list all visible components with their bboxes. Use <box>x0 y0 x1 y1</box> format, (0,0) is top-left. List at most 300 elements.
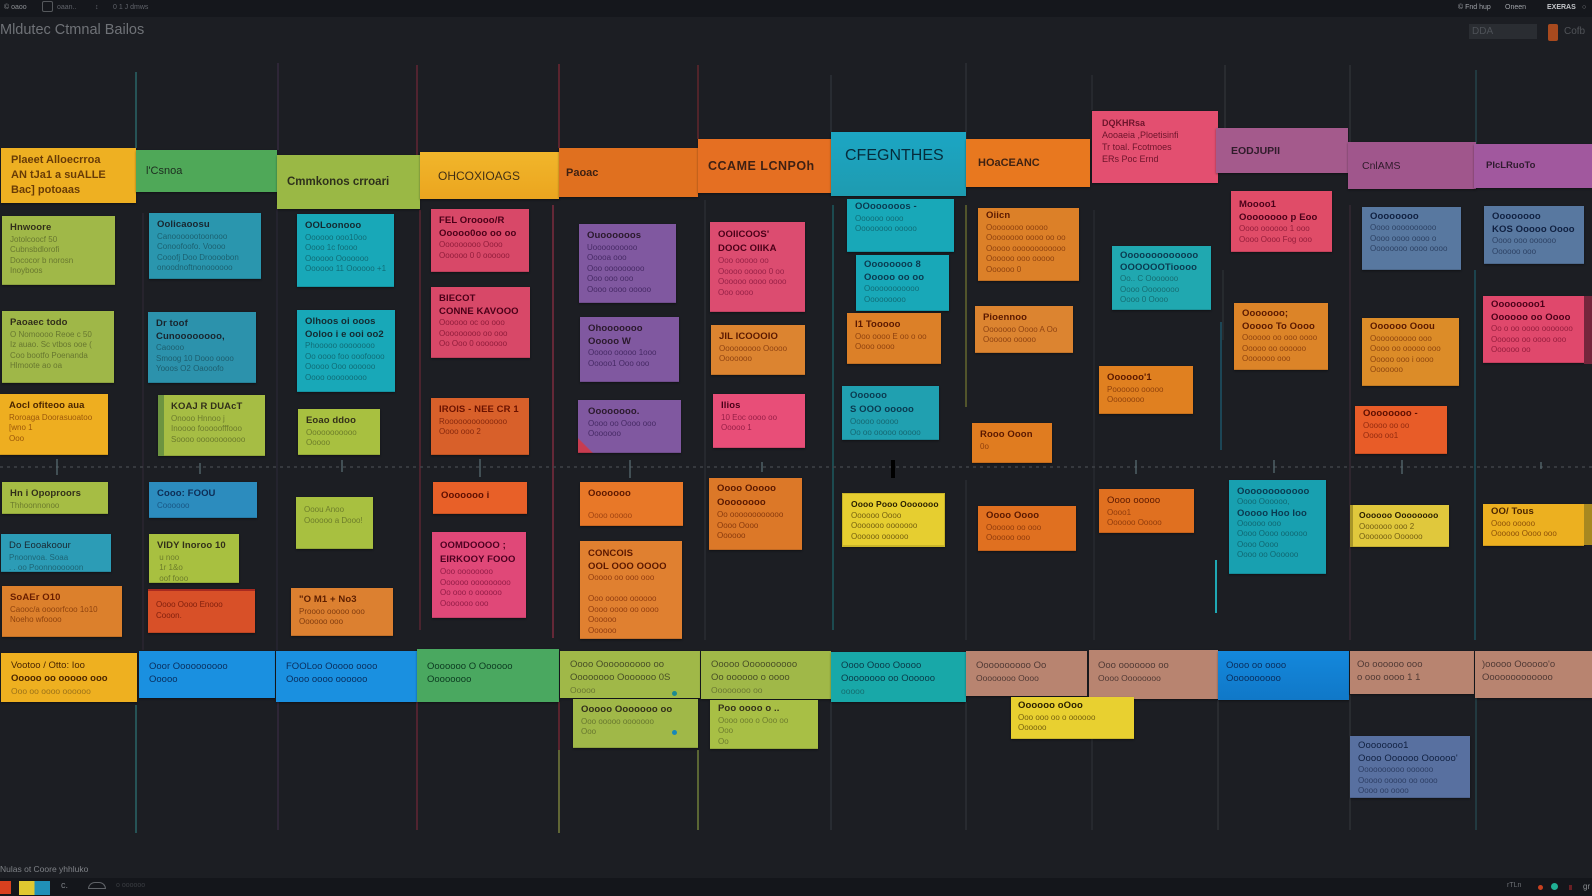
header 7: CFEGNTHES <box>845 147 944 164</box>
band 2: Ooor Oooooooooo <box>149 661 228 672</box>
top bar: ○ <box>1582 4 1586 11</box>
card: Paoaec todo <box>10 317 68 328</box>
band 3: Oooo oooo oooooo <box>286 674 367 685</box>
band 8: Oooooooooo Oo <box>976 660 1046 671</box>
top bar: Oneen <box>1505 4 1526 11</box>
card: Oooo oo ooooo ooo <box>1370 344 1441 353</box>
card: Oooooooo <box>1107 395 1144 404</box>
header 1: AN tJa1 a suALLE <box>11 169 106 181</box>
card: Ooooo 1 <box>721 423 752 432</box>
band 9: Ooo ooooooo oo <box>1098 660 1169 671</box>
card: Oooo Oooo <box>717 520 758 530</box>
band 8 <box>966 651 1087 696</box>
top bar: 0 1 J dmws <box>113 4 148 11</box>
card: Ooooo ooooo oo oooo <box>1358 776 1438 784</box>
card: Oooo oooooooooo <box>1370 223 1436 232</box>
note under band 6 <box>710 700 818 749</box>
card: Ooooa ooo <box>587 253 627 262</box>
card: Ooooo0oo oo oo <box>439 228 516 238</box>
header 1 <box>1 148 136 203</box>
card: Oooooooo oooo oooo <box>1370 244 1447 253</box>
card: Caooc/a oooorfcoo 1o10 <box>10 604 98 614</box>
card: Cunoooooooo, <box>156 330 225 342</box>
card: OOIICOOS' <box>718 229 769 240</box>
header 11 <box>1348 142 1476 189</box>
header 10: EODJUPII <box>1231 144 1280 156</box>
card: Jotolcoocf 50 <box>10 234 57 244</box>
icon: tray <box>88 882 106 889</box>
card: Proooo ooooo ooo <box>299 606 365 616</box>
card <box>1350 736 1470 798</box>
band 4: Oooooooo <box>427 674 471 685</box>
card: Iz auao. Sc vtbos ooe ( <box>10 340 92 349</box>
card: Oooooo <box>588 615 616 624</box>
card: Oooooooo 8 <box>864 259 921 270</box>
column 10 cards <box>1229 191 1332 575</box>
column 9 cards <box>1099 246 1211 534</box>
card: Smoog 10 Dooo oooo <box>156 354 234 362</box>
card: Oooo Pooo Ooooooo <box>851 499 939 509</box>
card <box>710 222 805 312</box>
band 2: Ooooo <box>149 674 178 685</box>
band 5: Ooooo <box>570 685 596 695</box>
card: Oooooo oo ooo oooo <box>1242 333 1317 342</box>
bottom status text: o oooooo <box>116 882 145 889</box>
band 7: Oooooooo oo Oooooo <box>841 673 935 684</box>
card: Oooooo <box>850 390 887 401</box>
icon: cloud: c. <box>61 880 68 890</box>
band 1 <box>1 653 137 702</box>
card: SoAEr O10 <box>10 592 61 603</box>
card: Oolicaoosu <box>157 219 210 230</box>
header 9: Tr toal. Fcotmoes <box>1102 142 1172 152</box>
card: Ouoooooos <box>587 230 641 241</box>
card: Oooooo Ooou <box>1370 321 1435 332</box>
card: [wno 1 <box>9 423 33 432</box>
card: Ooooo oo oo <box>1363 420 1409 430</box>
card <box>1229 480 1326 574</box>
card: Oooooo oo ooo <box>986 522 1041 532</box>
card <box>580 482 683 526</box>
card: Ooooooo <box>1370 365 1403 374</box>
search box: DDA <box>1472 26 1493 37</box>
card: Oooooo oooo oooo <box>718 277 787 286</box>
card <box>709 478 802 550</box>
card: Ilios <box>721 400 741 411</box>
card: Soooo ooooooooooo <box>171 434 245 444</box>
card: CONNE KAVOOO <box>439 306 519 316</box>
card <box>1231 191 1332 252</box>
card: Ooooooo i <box>441 490 489 501</box>
card: Ooooooooooo <box>306 428 357 436</box>
header 4 <box>420 152 559 199</box>
band 10 <box>1218 651 1349 700</box>
card: Conoofoofo. Voooo <box>157 242 226 251</box>
card strip <box>1584 296 1592 364</box>
card: Roroaga Doorasuoatoo <box>9 412 92 422</box>
card: Ooooooo ooo <box>1242 354 1290 363</box>
card: Oooooo Ooooooo <box>305 254 369 262</box>
note under band 8: Oooooo oOoo <box>1018 700 1083 711</box>
bottom bar <box>0 878 1592 896</box>
card: Oooo 1c foooo <box>305 243 357 252</box>
band 11 <box>1350 651 1474 694</box>
note under band 8: Oooooo <box>1018 723 1046 732</box>
card <box>842 386 939 440</box>
card: Oooo ooooo <box>1107 495 1160 506</box>
card: I1 Tooooo <box>855 319 901 330</box>
header 1: Bac] potoaas <box>11 184 80 196</box>
status indicators <box>1507 882 1590 891</box>
card: S OOO ooooo <box>850 404 914 415</box>
column 1 cards <box>0 216 122 638</box>
orange filter button: Cofb <box>1564 26 1585 37</box>
card: Olhoos oi ooos <box>305 316 376 327</box>
band 3 <box>276 651 417 702</box>
card <box>432 532 526 618</box>
card: Ooooo ooooo 1ooo <box>588 348 657 357</box>
card <box>2 586 122 637</box>
card: Oooooo oo oooo ooo <box>1491 334 1566 344</box>
column 5 cards <box>578 224 683 640</box>
icon: red tile <box>0 881 11 894</box>
band 10: Oooo oo oooo <box>1226 660 1286 671</box>
card: CONCOIS <box>588 548 633 559</box>
card: Ooooooooooooo <box>1120 250 1198 261</box>
top bar <box>0 0 1592 17</box>
card: Ooooooo <box>588 488 631 499</box>
card: Ooooooo <box>588 429 621 438</box>
card: Oo ooo o oooooo <box>440 588 502 597</box>
card: Ohooooooo <box>588 323 643 334</box>
band 8: Oooooooo Oooo <box>976 673 1039 683</box>
card: Oo oooo foo ooofoooo <box>305 352 385 360</box>
card <box>431 398 529 455</box>
card: Ooooo <box>306 438 330 447</box>
card: . . oo Poonnoooooon <box>9 563 83 572</box>
card: Oooooo ooo <box>1237 518 1281 528</box>
card: VIDY Inoroo 10 <box>157 540 226 551</box>
card: Cooon. <box>156 610 182 620</box>
card: Ooooooooo oo ooo <box>439 328 508 338</box>
card <box>580 317 679 382</box>
header 10 <box>1216 128 1348 173</box>
card: Oooo Oooooooo <box>1120 284 1179 294</box>
header 1: Plaeet Alloecrroa <box>11 154 100 166</box>
card: Dr toof <box>156 318 188 329</box>
card <box>2 311 114 383</box>
status dots <box>672 691 677 735</box>
card: Ooo oooooooo <box>440 567 493 576</box>
card <box>847 313 941 364</box>
card: Oooooo oooo <box>855 214 904 222</box>
card: Oo Ooo 0 ooooooo <box>439 339 507 348</box>
card <box>978 208 1079 281</box>
band 12 <box>1475 651 1592 698</box>
card: Uoooooooooo <box>587 242 637 252</box>
card: Oooo oooo oo oooo <box>588 604 659 614</box>
card strip <box>1584 504 1592 545</box>
card <box>711 325 805 375</box>
card: Oooooo'1 <box>1107 372 1152 383</box>
card <box>148 589 255 633</box>
card <box>431 209 529 272</box>
card: Oooo oo Oooo ooo <box>588 418 656 428</box>
card <box>856 255 949 311</box>
card: Oooo ooooo <box>588 511 632 520</box>
card: DOOC OIIKA <box>718 243 777 254</box>
band 9 <box>1089 650 1218 699</box>
card: Ooooooo ooo 2 <box>1359 522 1414 530</box>
band 6: Oo oooooo o oooo <box>711 672 790 683</box>
card: Oooooo oo <box>1491 345 1531 354</box>
card <box>297 214 394 287</box>
card: Oooo ooo 2 <box>439 427 481 436</box>
band 1: Vootoo / Otto: Ioo <box>11 660 85 671</box>
card: Oooooooooooo <box>864 284 919 293</box>
card: Oooooooo <box>1370 211 1419 222</box>
card: Ooooo oo oo <box>864 272 924 282</box>
note under band 5: Ooo ooooo ooooooo <box>581 716 654 726</box>
card <box>158 395 265 456</box>
card: Ooooooo ooooooo <box>851 521 917 530</box>
card: Ooooo1 Ooo ooo <box>588 358 649 368</box>
note under band 8 <box>1011 697 1134 739</box>
header 2 <box>136 150 277 192</box>
header 9: Aooaeia ,Ploetisinfi <box>1102 130 1179 140</box>
card: Oooooooooo ooo <box>1370 334 1432 342</box>
note under band 6: Oooo ooo o Ooo oo <box>718 716 788 724</box>
card: Ooloo i e ooi oo2 <box>305 328 384 340</box>
header 8: HOaCEANC <box>978 157 1040 169</box>
card: Aocl ofiteoo aua <box>9 400 84 411</box>
card: Oooooooooooo <box>1237 486 1309 497</box>
card: Oooooooo ooooo <box>986 222 1048 232</box>
card: Oooooo oc oo ooo <box>439 318 505 327</box>
header 9: ERs Poc Ernd <box>1102 154 1159 164</box>
card: Oo o oo oooo ooooooo <box>1491 324 1573 333</box>
card: OOMDOOOO ; <box>440 540 506 551</box>
card: Oooo oooooo 1 ooo <box>1239 224 1310 233</box>
card <box>1362 318 1459 386</box>
card <box>713 394 805 448</box>
card: Oooo ooooo <box>1491 518 1535 528</box>
card: Oooooooo1 <box>1491 299 1545 310</box>
card: Ooooooo Oooooo <box>1359 532 1423 541</box>
note under band 5: Ooo <box>581 727 596 736</box>
header 12 <box>1474 144 1592 188</box>
column 4 cards <box>431 209 530 619</box>
note under band 6: Poo oooo o .. <box>718 703 779 714</box>
card <box>291 588 393 636</box>
card: EIRKOOY FOOO <box>440 554 515 565</box>
card: Oooooo Oooo <box>851 510 901 520</box>
card: JIL ICOOOIO <box>719 331 778 342</box>
card: Ooooo Hoo Ioo <box>1237 508 1307 518</box>
card: Cooo: FOOU <box>157 488 216 499</box>
card: Oooo Oooo oooooo <box>1237 529 1307 538</box>
header 9 <box>1092 111 1218 183</box>
card: Oooooooo p Eoo <box>1239 212 1317 223</box>
footer caption: Nulas ot Coore yhhluko <box>0 864 88 874</box>
card: Oooooooo. <box>588 406 640 417</box>
card: "O M1 + No3 <box>299 594 357 605</box>
card: Oooooo ooooooooo <box>440 578 511 586</box>
card: Rooo Ooon <box>980 429 1033 440</box>
card <box>1362 207 1461 270</box>
band 6: Oooooooo oo <box>711 685 763 695</box>
dotted time axis <box>0 459 1592 478</box>
card: Ooooooo; <box>1242 308 1288 319</box>
band 11: Oo oooooo ooo <box>1357 659 1423 670</box>
header 3: Cmmkonos crroari <box>287 176 389 188</box>
card <box>2 482 108 514</box>
footer band row <box>1 649 1592 750</box>
card: Oooooo 0 <box>986 264 1021 274</box>
card <box>1234 303 1328 370</box>
board title: Mldutec Ctmnal Bailos <box>0 22 144 38</box>
card: Oooo Oooooo, <box>1237 497 1289 506</box>
band 7: ooooo <box>841 686 865 696</box>
card: OOoooooos - <box>855 201 917 212</box>
card: Phooooo oooooooo <box>305 341 375 350</box>
card: Oo.. C Ooooooo <box>1120 274 1178 283</box>
column 6 cards <box>709 222 805 551</box>
card: Oooooooo oooo oo oo <box>986 233 1066 242</box>
card <box>1483 296 1584 363</box>
card: Ooooo oooooooooooo <box>986 244 1066 252</box>
card <box>580 541 682 639</box>
card: Oooooooo <box>717 497 766 508</box>
card: OOLoonooo <box>305 220 361 231</box>
card: Pnoonvoa. Soaa <box>9 552 68 562</box>
card: Oooooo oo Oooo <box>1491 312 1570 323</box>
card <box>433 482 527 514</box>
card <box>298 409 380 455</box>
card <box>431 287 530 358</box>
card: Hn i Opoproors <box>10 488 81 499</box>
note under band 5: Ooooo Ooooooo oo <box>581 704 672 715</box>
band 12: )ooooo Oooooo'o <box>1482 659 1555 670</box>
card: Oooooo 0 0 oooooo <box>439 250 510 260</box>
card: Oooooo ooooo <box>983 335 1036 344</box>
card <box>1099 366 1193 414</box>
card <box>1483 504 1584 546</box>
note under band 8: Ooo ooo oo o oooooo <box>1018 712 1095 722</box>
column 3 cards <box>291 214 395 637</box>
card: Yooos O2 Oaooofo <box>156 364 224 373</box>
note under band 5 <box>573 699 698 748</box>
header 12: PIcLRuoTo <box>1486 160 1535 171</box>
card: Dococor b norosn <box>10 256 73 264</box>
card: Oooooo oooooo <box>851 532 908 540</box>
card <box>1099 489 1194 533</box>
card: Oooo oooo <box>855 342 895 351</box>
header 7 <box>831 132 966 196</box>
column 7 cards <box>842 199 954 548</box>
card <box>296 497 373 549</box>
card: Oiicn <box>986 210 1010 221</box>
header 5: Paoac <box>566 166 598 178</box>
card: Eoao ddoo <box>306 415 356 426</box>
card: Oo oooooooooooo <box>717 510 783 519</box>
card: Ooou Anoo <box>304 505 344 514</box>
card: Oooooo Oooooooo <box>1359 510 1438 520</box>
top bar: © Fnd hup <box>1458 4 1491 11</box>
card: Pioennoo <box>983 312 1027 323</box>
card: 1r 1&o <box>159 563 183 572</box>
card: Ooooo oo oooooo <box>1242 344 1306 352</box>
card: Ooooooo ooo <box>440 598 488 608</box>
card <box>149 482 257 518</box>
card: Oooo Oooooo Oooooo' <box>1358 753 1458 764</box>
band 2 <box>139 651 275 698</box>
card: Oooo oo Oooooo <box>1237 550 1298 559</box>
header row <box>1 111 1592 210</box>
card: Do Eooakoour <box>9 540 71 551</box>
band 4 <box>417 649 559 702</box>
card <box>1484 206 1584 264</box>
card: Coooooo <box>157 500 189 510</box>
band 5: Oooooooo Ooooooo 0S <box>570 672 670 683</box>
card: Oooooo ooo <box>299 617 343 626</box>
card: Oooooo a Dooo! <box>304 516 363 524</box>
orange filter button <box>1548 24 1585 41</box>
card: OOL OOO OOOO <box>588 561 667 572</box>
card: Oooooooo ooooo <box>855 224 917 233</box>
column 11 cards <box>1350 207 1470 799</box>
search box <box>1469 24 1537 39</box>
card <box>972 423 1052 463</box>
card: Oooooooooo oooooo <box>1358 765 1433 774</box>
card: Oooooo <box>588 626 616 634</box>
card <box>2 216 115 285</box>
card: Ooooooooo <box>864 294 906 304</box>
card: KOAJ R DUAcT <box>171 401 242 412</box>
card: u noo <box>159 552 179 562</box>
card: Oooooo ooo <box>1492 246 1536 256</box>
card: Oooo oooo oooo o <box>1370 234 1436 242</box>
card <box>149 534 239 583</box>
card <box>579 224 676 303</box>
card: Inoooo fooooofffooo <box>171 424 242 433</box>
card: Oooo Oooo <box>986 510 1039 521</box>
card: Ooo <box>9 434 24 442</box>
card: oof fooo <box>159 574 188 582</box>
top bar: ↕ <box>95 4 98 11</box>
card: Cooofj Doo Droooobon <box>157 252 239 262</box>
card: Moooo1 <box>1239 199 1276 210</box>
header 5 <box>559 148 698 197</box>
card: Oooooo <box>717 531 745 540</box>
card <box>1350 505 1449 547</box>
card: Oooo oo1 <box>1363 431 1398 440</box>
band 3: FOOLoo Ooooo oooo <box>286 661 377 672</box>
icon: yellow and blue tile <box>19 881 50 895</box>
card: Hlmoote ao oa <box>10 361 62 370</box>
band 5: Oooo Oooooooooo oo <box>570 659 664 670</box>
card: Inoyboos <box>10 266 42 275</box>
card: onoodnoftnonoooooo <box>157 263 233 272</box>
card <box>1 534 111 572</box>
card: Onooo Hnnoo j <box>171 414 225 422</box>
card <box>149 213 261 279</box>
card: Oooooooo1 <box>1358 740 1409 751</box>
card: OOOOOOTioooo <box>1120 262 1197 273</box>
card: Oooo oo oooo <box>1358 786 1409 795</box>
card: Thhoonnonoo <box>10 500 59 510</box>
card: Canooooootoonooo <box>157 232 227 240</box>
